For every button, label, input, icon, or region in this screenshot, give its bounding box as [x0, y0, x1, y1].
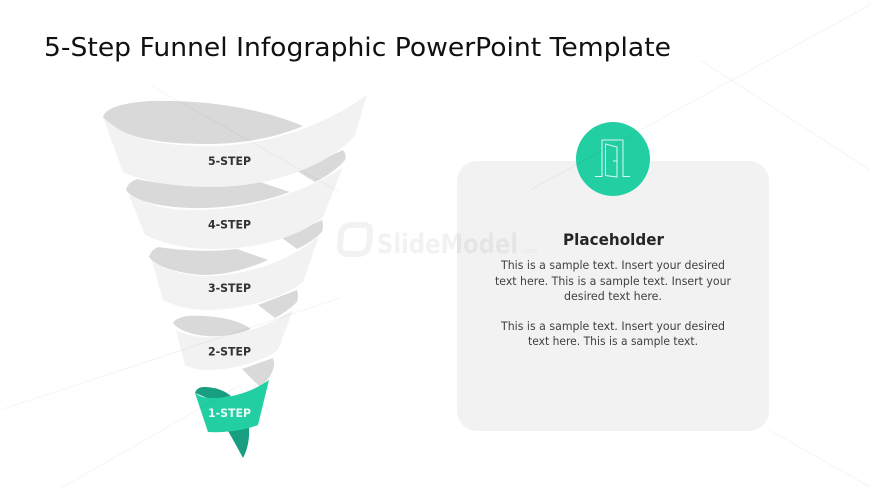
text block: second paragraph: text here. This is a sample text. — [528, 334, 698, 348]
panel: text card — [457, 161, 769, 431]
step 3 band — [152, 236, 319, 310]
title: 5-Step Funnel Infographic PowerPoint Template — [44, 33, 671, 63]
step 5 band — [103, 95, 367, 187]
heading: placeholder: Placeholder — [563, 230, 664, 249]
step 1 band — [195, 380, 269, 458]
text block: first paragraph — [495, 258, 731, 303]
text block: second paragraph — [500, 319, 725, 348]
text block: first paragraph: This is a sample text. Insert your desired — [500, 258, 725, 272]
funnel back: grey inner shapes — [103, 101, 346, 387]
funnel — [103, 95, 367, 458]
step 2 band — [176, 310, 293, 370]
icon: door in green circle — [576, 122, 650, 196]
watermark: SlideModel logo: SlideModel — [377, 229, 518, 260]
text block: first paragraph: desired text here. — [564, 289, 662, 303]
step 5 band: 5-STEP — [208, 154, 251, 168]
step 3 band: 3-STEP — [208, 281, 251, 295]
watermark: SlideModel logo — [340, 225, 537, 260]
step 4 band: 4-STEP — [208, 218, 251, 232]
watermark: SlideModel logo: .com — [520, 247, 537, 255]
step 2 band: 2-STEP — [208, 344, 251, 358]
step 1 band: 1-STEP — [208, 406, 251, 420]
text block: first paragraph: text here. This is a sample text. Insert your — [495, 274, 731, 288]
step 4 band — [129, 167, 343, 249]
text block: second paragraph: This is a sample text. Insert your desired — [500, 319, 725, 333]
